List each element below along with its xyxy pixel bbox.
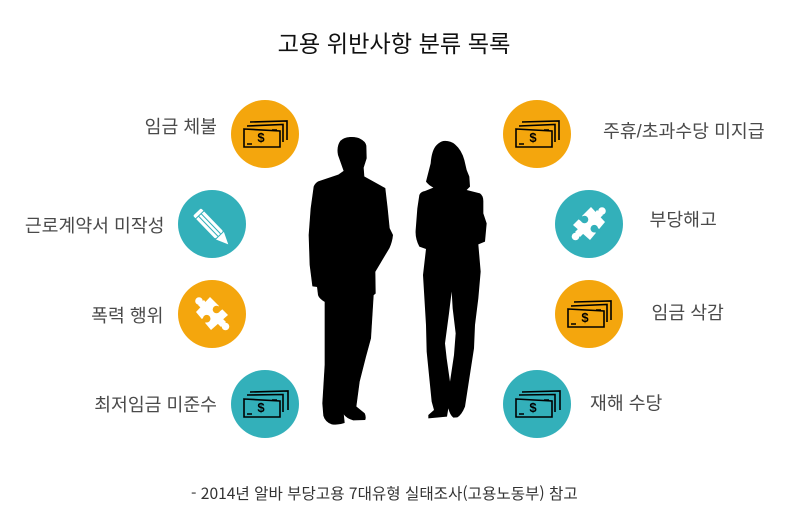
silhouette: man bbox=[309, 137, 393, 424]
icon: money on orange circle: $ bbox=[581, 310, 589, 325]
item: 임금 삭감 bbox=[555, 280, 724, 348]
icon: money on teal circle bbox=[503, 370, 571, 438]
icon: money on orange circle bbox=[555, 280, 623, 348]
label: 재해 수당 bbox=[590, 392, 663, 414]
label: 폭력 행위 bbox=[91, 305, 164, 326]
footnote: - 2014년 알바 부당고용 7대유형 실태조사(고용노동부) 참고 bbox=[191, 482, 578, 504]
icon: money on orange circle: $ bbox=[529, 130, 537, 145]
icon: pencil on teal circle bbox=[178, 190, 246, 258]
item: 주휴/초과수당 미지급 bbox=[503, 100, 765, 168]
item: 부당해고 bbox=[555, 190, 717, 258]
title: 고용 위반사항 분류 목록 bbox=[278, 25, 510, 59]
item: 재해 수당 bbox=[503, 370, 663, 438]
icon: puzzle on orange circle bbox=[178, 280, 246, 348]
item: 폭력 행위 bbox=[91, 280, 246, 348]
icon: money on orange circle: $ bbox=[257, 130, 265, 145]
label: 주휴/초과수당 미지급 bbox=[603, 120, 765, 142]
icon: money on teal circle bbox=[231, 370, 299, 438]
icon: money on teal circle: $ bbox=[529, 400, 537, 415]
label: 근로계약서 미작성 bbox=[25, 215, 164, 236]
icon: money on orange circle bbox=[231, 100, 299, 168]
label: 임금 체불 bbox=[145, 116, 217, 137]
icon: money on teal circle: $ bbox=[257, 400, 265, 415]
icon: money on orange circle bbox=[503, 100, 571, 168]
item: 최저임금 미준수 bbox=[94, 370, 299, 438]
label: 임금 삭감 bbox=[652, 302, 724, 323]
icon: puzzle on teal circle bbox=[555, 190, 623, 258]
item: 임금 체불 bbox=[145, 100, 299, 168]
item: 근로계약서 미작성 bbox=[25, 190, 246, 258]
label: 부당해고 bbox=[650, 209, 717, 230]
label: 최저임금 미준수 bbox=[94, 394, 217, 415]
silhouette: woman bbox=[416, 141, 487, 418]
